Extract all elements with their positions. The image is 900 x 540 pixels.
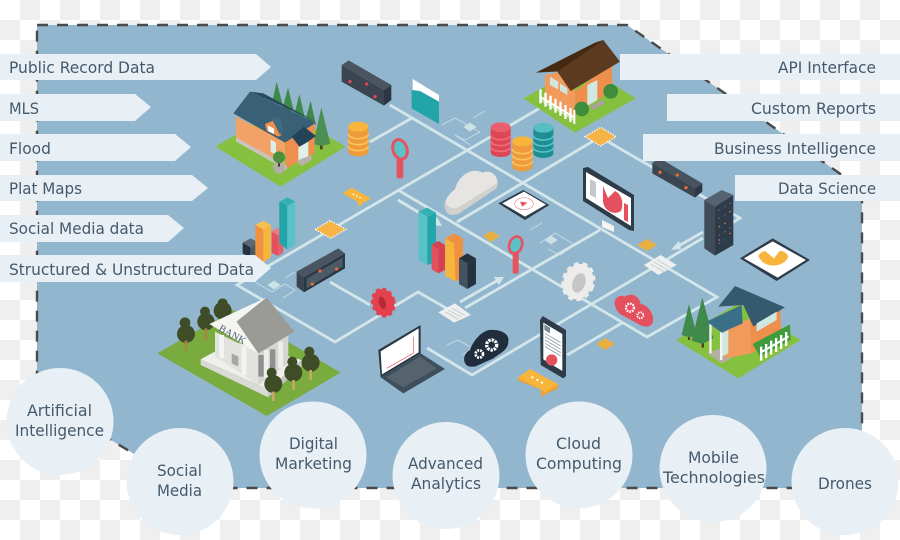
cloud icon bbox=[445, 171, 498, 215]
arrow heads bbox=[432, 217, 681, 285]
red gear bbox=[369, 287, 397, 319]
circle: Mobile Technologies bbox=[660, 415, 766, 522]
network lines bbox=[237, 105, 740, 375]
left input arrows bbox=[0, 54, 271, 282]
circle: Artificial Intelligence: Intelligence bbox=[15, 421, 104, 440]
output labels: Business Intelligence bbox=[714, 139, 876, 158]
circle: Cloud Computing: Cloud bbox=[556, 434, 601, 453]
circle: Advanced Analytics bbox=[392, 422, 500, 529]
circle: Advanced Analytics: Advanced bbox=[408, 454, 483, 473]
server, centre left bbox=[297, 248, 345, 292]
monitor with pie chart bbox=[583, 167, 634, 232]
input labels: Social Media data bbox=[9, 219, 144, 238]
input labels: Structured & Unstructured Data bbox=[9, 260, 254, 279]
server, top right bbox=[652, 158, 702, 198]
panel: blue dashed background bbox=[37, 25, 862, 488]
phone bbox=[540, 316, 566, 378]
input labels: Public Record Data bbox=[9, 58, 155, 77]
magnifier, centre bbox=[507, 235, 525, 274]
output labels: Custom Reports bbox=[751, 99, 876, 118]
speech bubble, upper bbox=[343, 188, 371, 207]
video tablet bbox=[498, 190, 549, 220]
document chip, right bbox=[644, 255, 677, 275]
bank sign text: BANK bbox=[217, 323, 248, 347]
laptop bbox=[378, 325, 445, 393]
black cloud with gears bbox=[464, 330, 509, 367]
folder icon bbox=[412, 79, 439, 124]
small orange chips bbox=[483, 231, 657, 350]
white gear bbox=[558, 260, 598, 304]
house with trees, top left bbox=[216, 82, 346, 187]
right output bars bbox=[620, 54, 900, 201]
input labels: Plat Maps bbox=[9, 179, 82, 198]
bar chart, centre bbox=[418, 208, 476, 289]
processor chip, left bbox=[315, 221, 346, 238]
circle: Drones bbox=[792, 428, 898, 535]
tablet with orange chart bbox=[740, 238, 810, 281]
circle: Digital Marketing: Marketing bbox=[275, 454, 352, 473]
speech bubble, lower bbox=[518, 369, 558, 397]
circle: Advanced Analytics: Analytics bbox=[411, 474, 481, 493]
circle: Mobile Technologies: Mobile bbox=[688, 448, 739, 467]
output labels: API Interface bbox=[778, 58, 876, 77]
circle: Cloud Computing: Computing bbox=[536, 454, 622, 473]
house with porch, right bbox=[676, 286, 801, 378]
circle: Social Media: Social bbox=[157, 461, 202, 480]
circle: Cloud Computing bbox=[526, 402, 632, 508]
document chip, left bbox=[438, 303, 471, 323]
coin stacks: red, orange, teal bbox=[491, 122, 553, 171]
output labels bbox=[714, 58, 876, 198]
house with fence, top right bbox=[523, 40, 636, 133]
circle: Social Media bbox=[126, 428, 234, 535]
circuit traces bbox=[255, 111, 575, 355]
circle: Digital Marketing bbox=[260, 402, 366, 508]
bar chart, left bbox=[243, 197, 295, 263]
red cloud with gears bbox=[615, 295, 653, 327]
circle: Digital Marketing: Digital bbox=[289, 434, 338, 453]
input labels bbox=[9, 58, 254, 279]
bank with trees bbox=[157, 297, 341, 416]
circle: Artificial Intelligence: Artificial bbox=[27, 401, 92, 420]
circle: Social Media: Media bbox=[157, 481, 202, 500]
output labels: Data Science bbox=[778, 179, 876, 198]
circle: Mobile Technologies: Technologies bbox=[662, 468, 765, 487]
coin stack orange bbox=[348, 122, 368, 156]
server tower bbox=[704, 190, 733, 256]
server, top left bbox=[342, 60, 391, 106]
circle: Artificial Intelligence bbox=[6, 368, 114, 475]
magnifier, left bbox=[390, 138, 410, 178]
input labels: Flood bbox=[9, 139, 51, 158]
circle: Drones: Drones bbox=[818, 474, 872, 493]
processor chip, top bbox=[585, 127, 616, 146]
input labels: MLS bbox=[9, 99, 39, 118]
